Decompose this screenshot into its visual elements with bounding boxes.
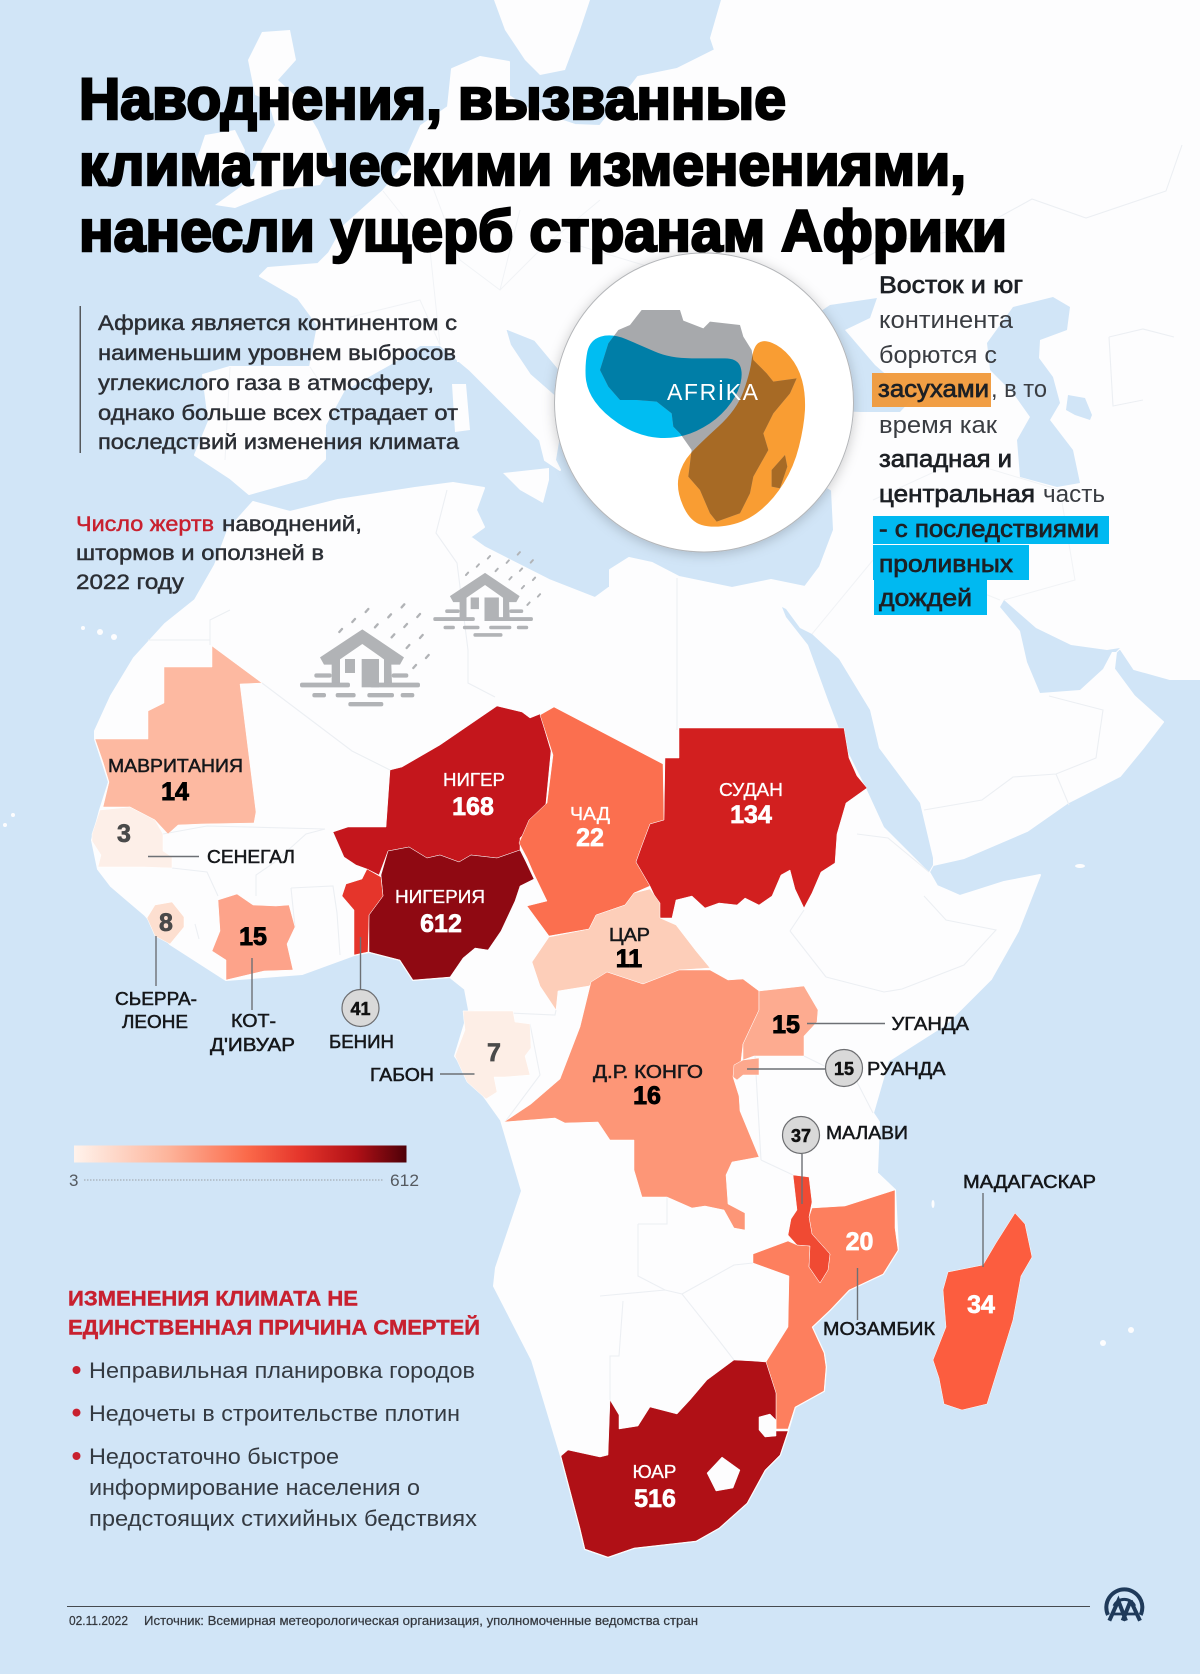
country: Mauritania — [95, 646, 262, 834]
right text block: droughts and rains: борются с — [879, 342, 997, 369]
label: Rwanda — [747, 1050, 946, 1086]
label: Gabon: 7 — [487, 1039, 501, 1067]
label: Gabon — [370, 1039, 501, 1085]
bullet list: предстоящих стихийных бедствиях — [89, 1506, 477, 1531]
right text block: droughts and rains: время как — [879, 412, 998, 439]
country: Benin — [342, 869, 383, 955]
inset circle: Africa climate zones — [540, 250, 860, 570]
intro text block: Африка является континентом с — [98, 312, 457, 335]
country: DR Congo — [504, 970, 759, 1230]
label: Mozambique: 20 — [846, 1228, 873, 1256]
label: Mozambique: МОЗАМБИК — [823, 1319, 936, 1339]
title: Наводнения, вызванные — [79, 67, 786, 132]
country: Madagascar — [933, 1213, 1032, 1410]
label: Uganda: УГАНДА — [892, 1014, 969, 1034]
panel: other causes of death — [68, 1288, 480, 1531]
legend: colour scale: 3 — [69, 1171, 78, 1190]
label: South Africa: 516 — [634, 1485, 676, 1513]
country: Niger — [333, 706, 551, 875]
label: Rwanda: 15 — [834, 1059, 854, 1079]
label: Rwanda: РУАНДА — [867, 1059, 946, 1079]
right text block: droughts and rains: , в то — [991, 376, 1047, 403]
label: Chad: 22 — [576, 824, 604, 852]
right text block: droughts and rains: дождей — [879, 585, 972, 612]
icon: AA logo — [1106, 1589, 1142, 1621]
highlights: rains — [873, 516, 1109, 615]
label: Niger: НИГЕР — [443, 770, 505, 790]
label: CAR: 11 — [616, 945, 642, 973]
label: Sudan: 134 — [730, 801, 772, 829]
label: Senegal: 3 — [117, 820, 131, 848]
country: Senegal — [92, 807, 172, 868]
footer: date and source: Источник: Всемирная метеорологическая организация, уполномоченные ведомства стран — [144, 1614, 698, 1628]
label: Sierra Leone: СЬЕРРА- — [115, 989, 197, 1009]
title: нанесли ущерб странам Африки — [79, 199, 1007, 264]
heading: other causes: ИЗМЕНЕНИЯ КЛИМАТА НЕ — [68, 1288, 358, 1310]
country: Chad — [519, 707, 664, 936]
right text block: droughts and rains: центральная — [879, 481, 1035, 508]
country: Malawi — [788, 1175, 830, 1283]
label: Niger — [443, 770, 505, 821]
label: Benin: 41 — [350, 999, 371, 1019]
right text block: droughts and rains: - с последствиями — [879, 516, 1099, 543]
label: Sudan — [719, 780, 783, 829]
heading: other causes: ЕДИНСТВЕННАЯ ПРИЧИНА СМЕРТЕЙ — [68, 1316, 480, 1340]
label: Cote d'Ivoire: 15 — [239, 923, 267, 951]
highlight: droughts — [872, 373, 991, 407]
label: Senegal — [117, 820, 295, 867]
country: Sierra Leone — [147, 902, 184, 944]
bullet list: Неправильная планировка городов — [89, 1358, 475, 1383]
right text block: droughts and rains: засухами — [878, 376, 989, 403]
country: Central African Republic — [532, 889, 710, 1010]
label: Mauritania: 14 — [161, 778, 189, 806]
country: South Africa — [561, 1360, 788, 1557]
heading: other causes — [68, 1288, 480, 1340]
label: Malawi: 37 — [791, 1126, 811, 1146]
map subtitle: death toll: 2022 году — [76, 571, 185, 594]
right text block: droughts and rains — [872, 272, 1109, 615]
legend: colour scale: 612 — [390, 1171, 419, 1190]
label: Chad — [570, 804, 610, 852]
label: Madagascar: МАДАГАСКАР — [963, 1172, 1096, 1192]
Afrika label: AFRİKA — [667, 379, 759, 405]
country: Sudan — [636, 728, 867, 918]
label: Cote d'Ivoire: КОТ- — [231, 1011, 276, 1031]
map subtitle: death toll: штормов и оползней в — [76, 542, 324, 565]
country: Uganda — [743, 986, 818, 1060]
right text block: droughts and rains: западная и — [879, 446, 1012, 473]
bullet list: Недостаточно быстрое — [89, 1444, 339, 1469]
label: Sudan: СУДАН — [719, 780, 783, 800]
label: Nigeria: 612 — [420, 910, 462, 938]
title — [79, 67, 1007, 264]
right text block: droughts and rains: континента — [879, 307, 1014, 334]
country: Cote d'Ivoire — [212, 894, 295, 980]
bullet list — [72, 1358, 477, 1531]
label: Gabon: ГАБОН — [370, 1065, 434, 1085]
bullet list: Недочеты в строительстве плотин — [89, 1401, 460, 1426]
label: Mauritania: МАВРИТАНИЯ — [108, 756, 243, 776]
country: Nigeria — [369, 847, 534, 980]
map subtitle: death toll: Число жертв — [76, 513, 214, 536]
label: DR Congo: Д.Р. КОНГО — [593, 1062, 703, 1082]
bullet list: информирование населения о — [89, 1475, 420, 1500]
legend: colour scale — [69, 1146, 419, 1190]
label: Niger: 168 — [452, 793, 494, 821]
label: CAR: ЦАР — [609, 925, 650, 945]
label: Malawi — [782, 1116, 908, 1204]
label: Senegal: СЕНЕГАЛ — [207, 847, 295, 867]
label: Sierra Leone: ЛЕОНЕ — [122, 1012, 188, 1032]
title: климатическими изменениями, — [79, 133, 966, 198]
label: Sierra Leone: 8 — [159, 909, 173, 937]
label: Benin — [329, 937, 394, 1052]
country labels and values — [108, 756, 1096, 1513]
label: Nigeria — [395, 887, 485, 938]
choropleth countries — [92, 646, 1032, 1557]
intro text block: последствий изменения климата — [98, 431, 459, 454]
label: Cote d'Ivoire: Д'ИВУАР — [210, 1035, 295, 1055]
icon: flooded house large — [300, 604, 429, 706]
rain zone blob — [586, 335, 742, 438]
label: Chad: ЧАД — [570, 804, 610, 824]
footer: date and source — [67, 1606, 1090, 1628]
label: South Africa — [632, 1462, 676, 1513]
label: Cote d'Ivoire — [210, 923, 295, 1055]
label: South Africa: ЮАР — [632, 1462, 676, 1482]
footer: date and source: 02.11.2022 — [69, 1614, 128, 1628]
map subtitle: death toll: наводнений, — [222, 513, 362, 536]
intro text block — [80, 306, 459, 454]
country: Gabon — [455, 1011, 531, 1099]
label: Madagascar: 34 — [967, 1291, 995, 1319]
country: Rwanda — [733, 1058, 759, 1080]
label: Mozambique — [823, 1228, 936, 1339]
label: Uganda — [772, 1011, 969, 1039]
right text block: droughts and rains: проливных — [879, 551, 1013, 578]
label: CAR — [609, 925, 650, 973]
country: Mozambique — [753, 1190, 898, 1429]
Africa silhouette with overlaps — [600, 310, 797, 522]
label: Nigeria: НИГЕРИЯ — [395, 887, 485, 907]
label: Madagascar — [963, 1172, 1096, 1319]
intro text block: однако больше всех страдает от — [98, 402, 458, 425]
label: Sierra Leone — [115, 909, 197, 1032]
label: DR Congo — [593, 1062, 703, 1110]
label: Benin: БЕНИН — [329, 1032, 394, 1052]
intro text block: наименьшим уровнем выбросов — [98, 342, 456, 365]
label: Mauritania — [108, 756, 243, 806]
label: Malawi: МАЛАВИ — [826, 1123, 908, 1143]
icon: flooded house small — [433, 552, 540, 637]
intro text block: углекислого газа в атмосферу, — [98, 372, 434, 395]
map subtitle: death toll — [76, 513, 362, 594]
right text block: droughts and rains: часть — [1043, 481, 1105, 508]
drought zone blob — [678, 341, 805, 527]
label: Uganda: 15 — [772, 1011, 800, 1039]
right text block: droughts and rains: Восток и юг — [879, 272, 1023, 299]
label: DR Congo: 16 — [633, 1082, 661, 1110]
